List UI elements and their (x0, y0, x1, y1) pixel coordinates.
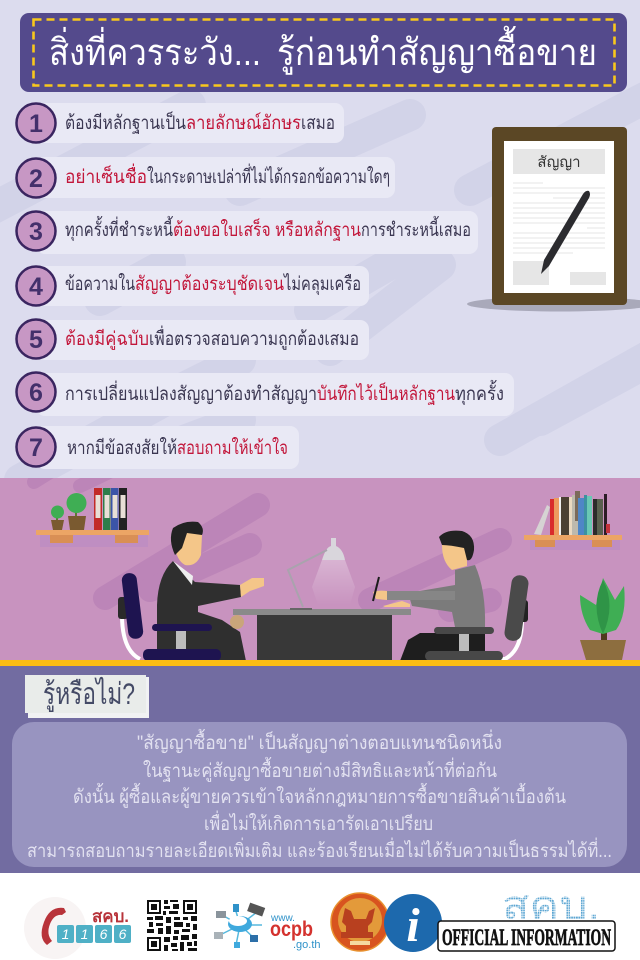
item 6: ทุกครั้ง (455, 380, 504, 406)
item 5: เพื่อตรวจสอบความถูกต้องเสมอ (149, 325, 359, 350)
logo: government seal (331, 893, 389, 951)
logo: hotline 1166: 6 (100, 926, 108, 942)
logo: ocpb website: .go.th (293, 939, 321, 951)
item 2 (16, 157, 395, 198)
plant (580, 578, 626, 660)
logo: ocpb website: ocpb (270, 918, 313, 941)
item 5: 5 (29, 326, 43, 354)
desk (233, 609, 411, 661)
shelf with books (524, 491, 622, 550)
rounded text box (12, 722, 627, 867)
item 4: สัญญาต้องระบุชัดเจน (135, 274, 284, 296)
item 5: ต้องมีคู่ฉบับ (65, 328, 149, 350)
item 3: การชำระหนี้เสมอ (361, 216, 471, 241)
item 4 (16, 266, 369, 306)
rounded text box: ในฐานะคู่สัญญาซื้อขายต่างมีสิทธิและหน้าที่ต่อกัน (143, 757, 497, 782)
item 3: ทุกครั้งที่ชำระหนี้ (65, 216, 173, 242)
item 3: ต้องขอใบเสร็จ หรือหลักฐาน (173, 217, 361, 241)
item 3: 3 (29, 218, 43, 246)
icon: contract clipboard (467, 127, 640, 312)
rounded text box: เพื่อไม่ให้เกิดการเอารัดเอาเปรียบ (204, 810, 433, 835)
rounded text box: "สัญญาซื้อขาย" เป็นสัญญาต่างตอบแทนชนิดหนึ่ง (137, 729, 502, 754)
title text: รู้ก่อนทำสัญญาซื้อขาย (277, 25, 597, 75)
businessman left (118, 522, 264, 661)
heading: did you know (25, 675, 149, 718)
item 3 (16, 211, 478, 254)
item 6: บันทึกไว้เป็นหลักฐาน (317, 381, 455, 405)
logo: hotline 1166 (24, 897, 131, 959)
item 6 (16, 372, 514, 416)
item 7 (16, 426, 299, 469)
logo: official information (438, 884, 615, 951)
item 1: ต้องมีหลักฐานเป็น (65, 110, 186, 134)
item 2: 2 (29, 165, 43, 193)
shelf with plants and binders (36, 488, 149, 547)
item 1 (16, 103, 344, 143)
item 1: เสมอ (301, 113, 335, 134)
panel: did you know (0, 666, 640, 873)
yellow floor stripe (0, 660, 640, 666)
item 4: ไม่คลุมเครือ (282, 273, 361, 296)
item 1: 1 (29, 110, 43, 138)
logo: hotline 1166: 6 (119, 926, 127, 942)
item 6: การเปลี่ยนแปลงสัญญาต้องทำสัญญา (65, 380, 317, 405)
logo: information i (384, 894, 442, 952)
title banner (20, 13, 627, 92)
logo: information i: i (406, 899, 420, 952)
logo: hotline 1166: 1 (62, 926, 69, 942)
logo: hotline 1166: 1 (81, 926, 88, 942)
businessman right (373, 531, 530, 661)
item 5 (16, 320, 369, 360)
logo: official information: สคบ. (502, 884, 600, 928)
desk lamp (288, 538, 355, 609)
title text: สิ่งที่ควรระวัง... (49, 26, 261, 73)
QR code (147, 900, 197, 951)
icon: contract clipboard: สัญญา (537, 154, 581, 171)
logo: ocpb website (214, 903, 321, 951)
footer logos (0, 873, 640, 960)
title text (49, 25, 597, 75)
illustration: office scene (0, 462, 640, 661)
item 2: ในกระดาษเปล่าที่ไม่ได้กรอกข้อความใดๆ (147, 163, 390, 188)
item 7: หากมีข้อสงสัยให้ (67, 437, 177, 459)
item 2: อย่าเซ็นชื่อ (65, 163, 147, 188)
item 1: ลายลักษณ์อักษร (186, 112, 301, 134)
logo: ocpb website: www. (270, 913, 295, 924)
item 6: 6 (29, 379, 43, 407)
rounded text box: ดังนั้น ผู้ซื้อและผู้ขายควรเข้าใจหลักกฎหมายการซื้อขายสินค้าเบื้องต้น (73, 783, 566, 808)
logo: hotline 1166: สคบ. (92, 907, 129, 926)
item 7: 7 (29, 434, 43, 462)
item 4: 4 (29, 273, 43, 301)
heading: did you know: รู้หรือไม่? (43, 676, 135, 712)
item 7: สอบถามให้เข้าใจ (177, 437, 288, 459)
item 4: ข้อความใน (65, 273, 135, 295)
